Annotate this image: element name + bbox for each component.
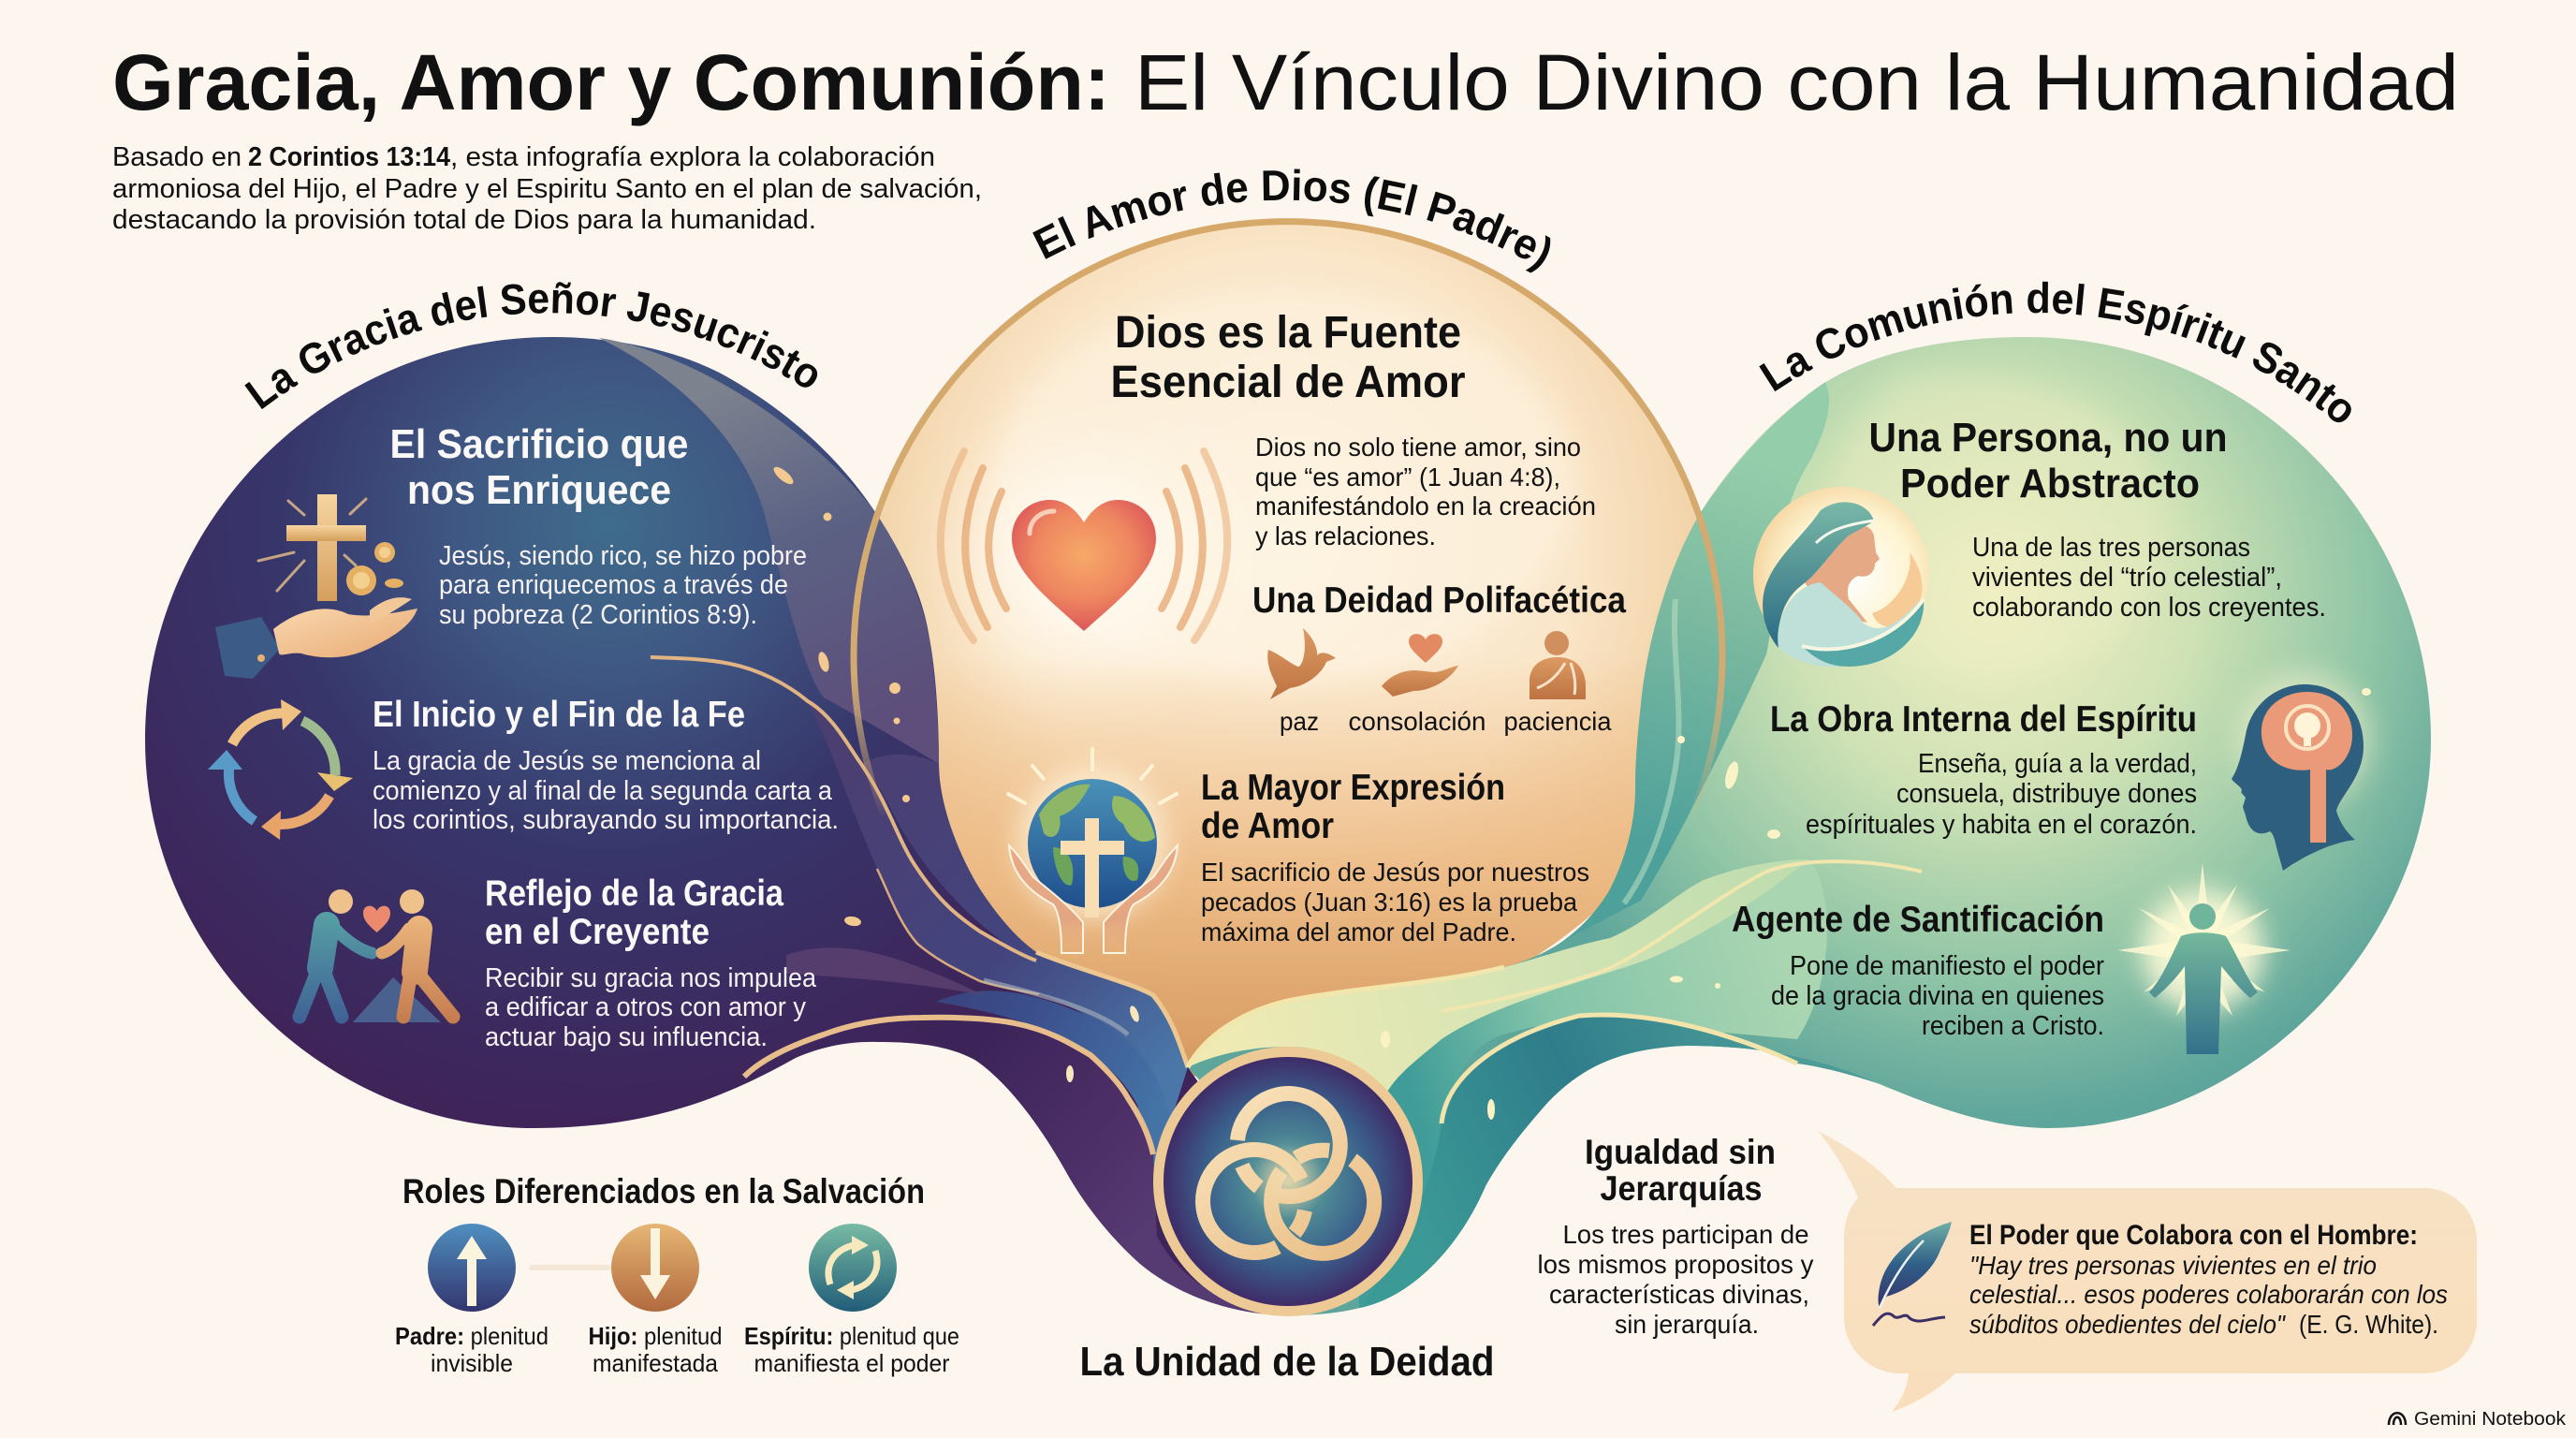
panel text: reflejo de la gracia: en el Creyente [485, 912, 710, 952]
panel text: agente de santificación: Pone de manifiesto el poder [1790, 951, 2104, 981]
icon: quill [1873, 1222, 1952, 1326]
panel text: una persona: colaborando con los creyentes. [1972, 593, 2326, 623]
panel text: el sacrificio [389, 421, 807, 630]
intro text: Basado en [112, 142, 242, 172]
panel text: reflejo de la gracia [485, 873, 817, 1052]
role labels: Espíritu: plenitud que [744, 1322, 959, 1350]
panel text: agente de santificación: de la gracia divina en quienes [1771, 981, 2104, 1011]
text block: igualdad sin jerarquías [1537, 1133, 1814, 1339]
panel text: el sacrificio: para enriquecemos a través de [439, 570, 788, 600]
panel text: el inicio y el fin: los corintios, subrayando su importancia. [373, 805, 839, 835]
intro text [112, 142, 982, 235]
text block: igualdad sin jerarquías: características divinas, [1549, 1280, 1809, 1309]
callout: cita de E. G. White: (E. G. White). [2299, 1310, 2438, 1339]
icons: paz, consolación, paciencia: paciencia [1503, 707, 1612, 736]
heading: roles: Roles Diferenciados en la Salvación [402, 1172, 925, 1211]
icon: cross and giving hand [215, 494, 417, 679]
panel text: reflejo de la gracia: Reflejo de la Gracia [485, 873, 783, 914]
icon: radiating heart [941, 451, 1227, 640]
medallion: triquetra [1153, 1047, 1423, 1316]
intro text: armoniosa del Hijo, el Padre y el Espiritu Santo en el plan de salvación, [112, 174, 982, 204]
heading: la comunión del espíritu santo: La Comunión del Espíritu Santo [1759, 281, 2351, 423]
panel text: reflejo de la gracia: Recibir su gracia nos impulea [485, 963, 817, 993]
panel text: reflejo de la gracia: actuar bajo su influencia. [485, 1022, 768, 1052]
panel text: el sacrificio: El Sacrificio que [389, 421, 689, 467]
heading: una deidad polifacética: Una Deidad Polifacética [1252, 580, 1626, 621]
panel text: reflejo de la gracia: a edificar a otros con amor y [485, 992, 806, 1022]
panel text: la obra interna: espírituales y habita en el corazón. [1806, 810, 2197, 840]
panel text: una persona: Una de las tres personas [1972, 533, 2250, 563]
panel text: dios es la fuente: y las relaciones. [1255, 521, 1436, 550]
panel text: el sacrificio: su pobreza (2 Corintios 8:9). [439, 600, 757, 630]
panel text: dios es la fuente: Dios no solo tiene amor, sino [1255, 433, 1581, 462]
callout: cita de E. G. White: El Poder que Colabora con el Hombre: [1969, 1220, 2418, 1251]
role labels: invisible [431, 1349, 513, 1377]
panel text: la mayor expresión: de Amor [1201, 806, 1334, 846]
icon: globe, cross and hands [1008, 749, 1178, 953]
panel text: dios es la fuente [1110, 308, 1596, 550]
section: roles diferenciados [395, 1172, 959, 1377]
title: Gracia, Amor y Comunión: [112, 38, 1110, 126]
panel text: el sacrificio: nos Enriquece [407, 467, 671, 513]
callout: cita de E. G. White [1818, 1131, 2477, 1412]
panel text: la mayor expresión: La Mayor Expresión [1201, 768, 1505, 808]
panel text: dios es la fuente: que “es amor” (1 Juan 4:8), [1255, 462, 1560, 492]
text block: igualdad sin jerarquías: Los tres participan de [1563, 1220, 1808, 1249]
panel text: la obra interna [1770, 699, 2197, 840]
watermark: gemini notebook: Gemini Notebook [2414, 1409, 2567, 1430]
callout: cita de E. G. White: celestial... esos poderes colaborarán con los [1969, 1280, 2448, 1309]
panel text: la obra interna: La Obra Interna del Espíritu [1770, 699, 2197, 740]
title: El Vínculo Divino con la Humanidad [1134, 38, 2459, 126]
role labels: manifestada [593, 1349, 718, 1377]
panel text: el sacrificio: Jesús, siendo rico, se hizo pobre [439, 541, 807, 571]
panel text: agente de santificación [1732, 900, 2104, 1041]
panel text: la mayor expresión: pecados (Juan 3:16) es la prueba [1201, 888, 1577, 917]
role labels: Hijo: plenitud [588, 1322, 723, 1350]
panel text: el inicio y el fin [373, 695, 839, 835]
sparkles [771, 464, 2371, 1120]
text block: igualdad sin jerarquías: sin jerarquía. [1615, 1310, 1759, 1339]
caption: la unidad de la deidad: La Unidad de la Deidad [1080, 1339, 1494, 1385]
intro text: 2 Corintios 13:14 [248, 142, 450, 172]
panel: la gracia blob [145, 337, 1291, 1315]
panel text: una persona: Una Persona, no un [1868, 415, 2228, 461]
panel text: dios es la fuente: manifestándolo en la creación [1255, 492, 1596, 521]
icon: espíritu cycle [809, 1224, 897, 1312]
panel text: una persona [1868, 415, 2326, 623]
role labels [395, 1322, 959, 1377]
panel text: la obra interna: Enseña, guía a la verdad, [1918, 749, 2197, 779]
panel text: el inicio y el fin: comienzo y al final de la segunda carta a [373, 776, 833, 806]
panel: la comunión blob [1188, 337, 2431, 1315]
panel text: la obra interna: consuela, distribuye dones [1896, 779, 2197, 809]
icon: hijo arrow down [611, 1224, 699, 1312]
icons: paz, consolación, paciencia: paz [1280, 707, 1319, 736]
panel text: la mayor expresión [1201, 768, 1589, 946]
central circle fill: el amor de Dios [854, 223, 1722, 1077]
intro text: , esta infografía explora la colaboración [450, 142, 935, 172]
heading: el amor de dios: El Amor de Dios (El Padre) [1032, 169, 1550, 273]
heading: la gracia del señor jesucristo: La Gracia del Señor Jesucristo [244, 282, 818, 410]
text block: igualdad sin jerarquías: Jerarquías [1601, 1169, 1762, 1208]
text block: igualdad sin jerarquías: los mismos propositos y [1537, 1250, 1814, 1279]
role labels: manifiesta el poder [754, 1349, 950, 1377]
callout: cita de E. G. White: "Hay tres personas vivientes en el trio [1969, 1251, 2377, 1280]
icon: radiant person [2117, 863, 2291, 1054]
icon: spirit figure in orb [1753, 487, 1929, 668]
icon: two people and heart [300, 889, 453, 1022]
title [112, 38, 2459, 126]
panel text: dios es la fuente: Dios es la Fuente [1115, 308, 1461, 358]
panel text: dios es la fuente: Esencial de Amor [1110, 358, 1466, 407]
icon: cycle arrows [208, 699, 353, 840]
icons: paz, consolación, paciencia [1267, 628, 1612, 736]
text block: igualdad sin jerarquías: Igualdad sin [1585, 1133, 1776, 1171]
panel text: la mayor expresión: El sacrificio de Jesús por nuestros [1201, 858, 1589, 887]
callout: cita de E. G. White: súbditos obedientes del cielo" [1969, 1310, 2286, 1339]
intro text: destacando la provisión total de Dios para la humanidad. [112, 205, 816, 235]
icon: head with glowing mind [2232, 672, 2372, 871]
panel text: una persona: Poder Abstracto [1900, 461, 2200, 506]
role labels: Padre: plenitud [395, 1322, 549, 1350]
panel text: la mayor expresión: máxima del amor del Padre. [1201, 917, 1516, 946]
icons: paz, consolación, paciencia: consolación [1348, 707, 1486, 736]
panel text: el inicio y el fin: La gracia de Jesús se menciona al [373, 746, 761, 776]
central circle gold ring [854, 222, 1722, 814]
panel text: una persona: vivientes del “trío celestial”, [1972, 563, 2282, 593]
panel text: el inicio y el fin: El Inicio y el Fin de la Fe [373, 695, 745, 735]
icon: padre arrow up [428, 1224, 516, 1312]
panel text: agente de santificación: Agente de Santificación [1732, 900, 2104, 940]
panel text: agente de santificación: reciben a Cristo. [1922, 1011, 2104, 1041]
